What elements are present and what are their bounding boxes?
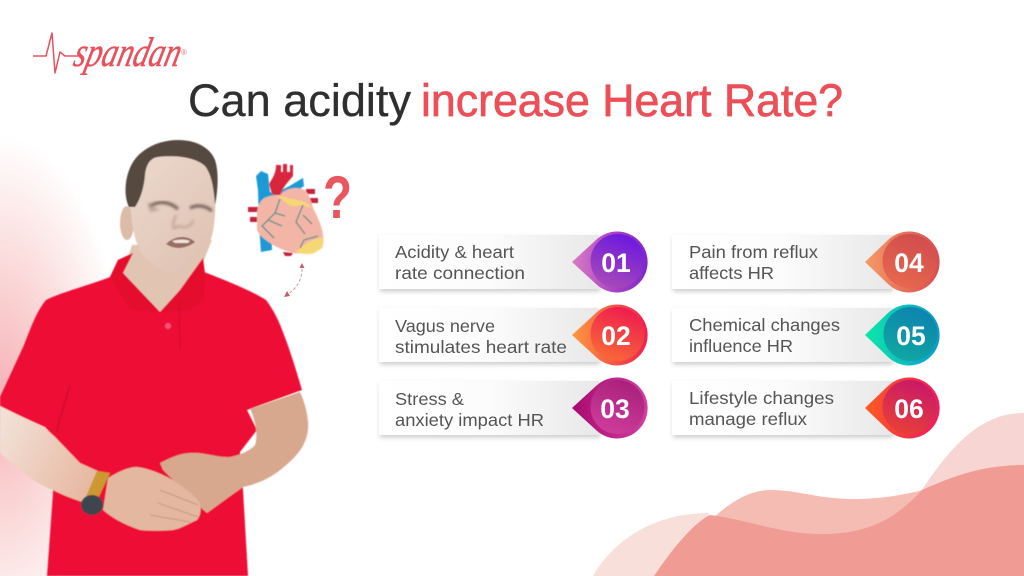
text xyxy=(395,389,544,430)
badge xyxy=(572,378,648,438)
arrow: dashed curved xyxy=(284,263,304,297)
text: affects HR xyxy=(689,263,774,283)
finger lines xyxy=(150,490,198,522)
right arm and hand xyxy=(160,392,308,513)
card xyxy=(379,381,599,435)
aorta xyxy=(269,164,293,196)
placket xyxy=(179,300,180,350)
panel: item 01 xyxy=(379,231,648,292)
eye socket shadow xyxy=(147,202,160,212)
text: Chemical changes xyxy=(689,315,840,335)
side vessels xyxy=(248,189,318,222)
text xyxy=(395,242,525,283)
text: Acidity & heart xyxy=(395,242,514,262)
number: 04 xyxy=(894,248,924,278)
text xyxy=(689,388,834,429)
heart yellow fat xyxy=(277,196,323,254)
card xyxy=(672,308,892,362)
title xyxy=(188,75,843,126)
heart left vessel xyxy=(256,171,272,252)
card xyxy=(379,235,599,289)
heart base xyxy=(283,252,293,256)
ear xyxy=(120,206,134,240)
left arm xyxy=(0,406,100,505)
icon: anatomical heart xyxy=(248,164,323,256)
shirt button xyxy=(165,323,171,329)
panel: item 06 xyxy=(672,378,940,438)
text: Stress & xyxy=(395,389,464,409)
shirt xyxy=(0,253,302,576)
logo wordmark: spandan xyxy=(70,29,187,75)
number: 03 xyxy=(600,394,630,424)
panel: item 02 xyxy=(379,305,648,366)
text xyxy=(689,315,840,356)
number: 01 xyxy=(601,248,631,278)
hair xyxy=(126,140,218,207)
neck xyxy=(123,240,212,312)
badge inner xyxy=(882,234,936,288)
title: increase Heart Rate? xyxy=(421,75,843,126)
badge xyxy=(865,305,940,366)
number: 06 xyxy=(894,394,924,424)
card xyxy=(379,308,599,362)
text: stimulates heart rate xyxy=(395,337,567,357)
text: anxiety impact HR xyxy=(395,410,544,430)
badge inner xyxy=(590,234,644,288)
text: manage reflux xyxy=(689,409,807,429)
text: influence HR xyxy=(689,336,793,356)
text: Lifestyle changes xyxy=(689,388,834,408)
badge inner xyxy=(884,307,938,361)
panel: item 04 xyxy=(672,231,940,292)
logo xyxy=(33,29,187,75)
panel: item 05 xyxy=(672,305,940,366)
nose xyxy=(173,215,193,228)
text: Pain from reflux xyxy=(689,242,818,262)
title: Can acidity xyxy=(188,75,411,126)
bottom right waves xyxy=(593,413,1024,576)
heart body xyxy=(257,188,323,253)
text: Vagus nerve xyxy=(395,316,495,336)
logo pulse line xyxy=(33,33,78,73)
sleeve fold xyxy=(57,385,70,432)
badge inner xyxy=(590,380,644,434)
teeth xyxy=(172,240,190,243)
eyes and brows xyxy=(150,202,212,211)
panel: item 03 xyxy=(379,378,648,438)
text xyxy=(689,242,818,283)
badge xyxy=(572,231,648,292)
person holding stomach xyxy=(0,140,308,576)
badge xyxy=(865,378,940,438)
face xyxy=(131,153,215,273)
badge xyxy=(572,305,648,366)
badge xyxy=(865,231,940,292)
background pink glow xyxy=(0,130,130,576)
icon: question mark: ? xyxy=(323,164,352,231)
heart upper blue vessel xyxy=(266,178,304,208)
collar xyxy=(110,253,205,312)
coronary vessels xyxy=(262,199,318,248)
card xyxy=(672,235,892,289)
logo registered mark: ® xyxy=(181,48,187,57)
text: rate connection xyxy=(395,263,525,283)
text xyxy=(395,316,567,357)
watch face xyxy=(81,495,103,515)
mouth xyxy=(166,237,195,248)
number: 02 xyxy=(601,321,631,351)
number: 05 xyxy=(896,321,926,351)
card xyxy=(672,381,892,435)
badge inner xyxy=(882,380,936,434)
watch strap xyxy=(85,471,110,499)
badge inner xyxy=(590,307,644,361)
left hand xyxy=(103,467,201,531)
